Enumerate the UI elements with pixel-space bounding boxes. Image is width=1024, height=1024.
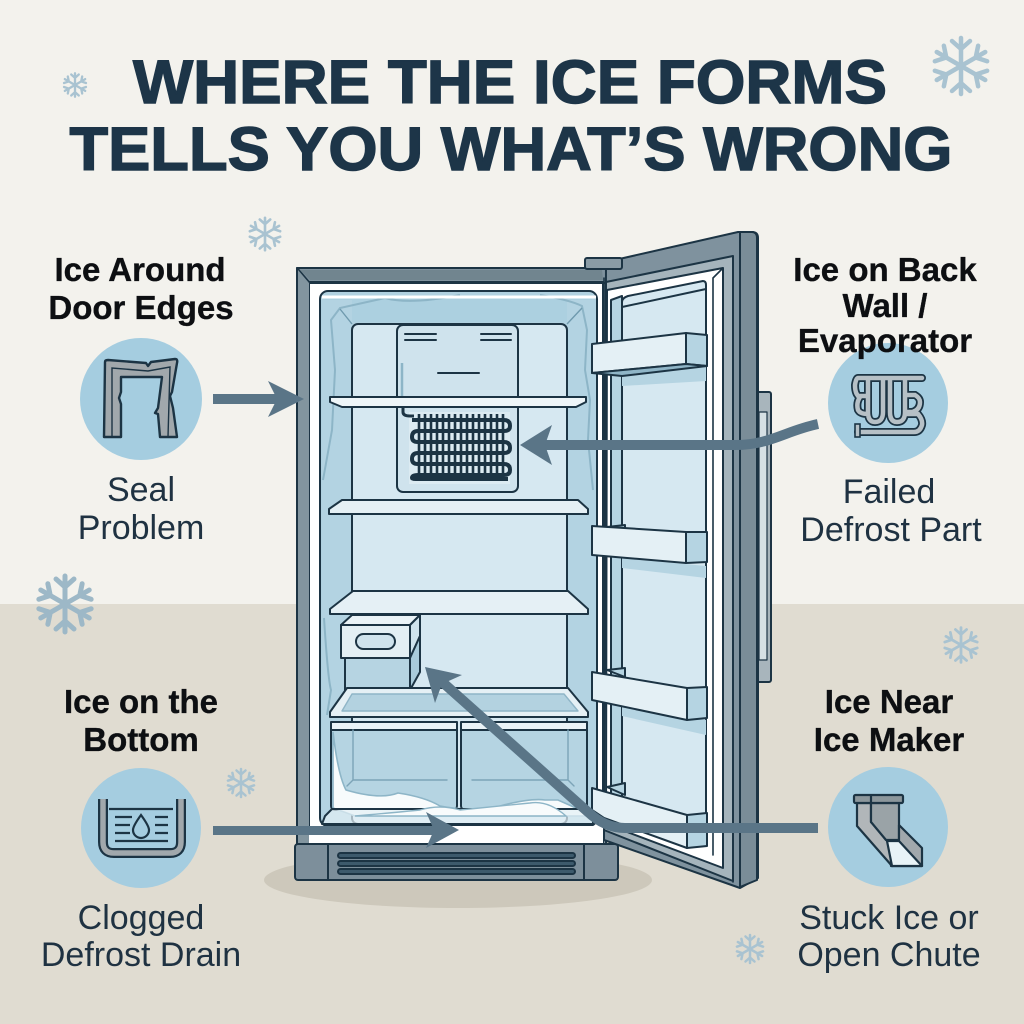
shelf 2 — [329, 500, 588, 514]
heading: ice near ice maker: Ice Maker — [814, 721, 964, 758]
cavity floor — [322, 809, 593, 824]
crisper drawers — [331, 722, 587, 810]
heading: ice on the bottom: Ice on the — [64, 683, 218, 720]
heading: ice around door edges: Door Edges — [48, 289, 234, 326]
door bin 3 — [592, 668, 707, 720]
floor shadow — [264, 852, 652, 908]
ice on drawers bottom — [333, 732, 586, 816]
callout: ice maker — [797, 683, 981, 974]
shelf 1 — [330, 397, 586, 407]
heading: ice near ice maker: Ice Near — [825, 683, 953, 720]
callout: seal problem — [48, 251, 234, 547]
heading: ice on back wall: Wall / — [843, 287, 927, 324]
title: WHERE THE ICE FORMS — [133, 48, 887, 116]
handle — [755, 392, 771, 682]
refrigerator — [295, 232, 771, 888]
rear panel — [397, 325, 518, 492]
heading: ice around door edges: Ice Around — [54, 251, 226, 288]
door bin 4 — [592, 783, 707, 848]
interior cavity — [320, 291, 597, 826]
icon: snowflake bottom left — [227, 769, 255, 797]
callout: failed defrost — [793, 251, 982, 549]
background floor — [0, 604, 1024, 1024]
icon: door seal — [80, 338, 202, 460]
label: clogged defrost drain: Defrost Drain — [41, 936, 241, 974]
evaporator coil — [403, 408, 510, 484]
ice box — [341, 615, 420, 690]
label: stuck ice or open chute: Stuck Ice or — [799, 899, 979, 937]
icon: snowflake left at floor line — [36, 576, 94, 632]
door shelf shadows — [622, 366, 706, 735]
icon: snowflake top right — [932, 38, 990, 94]
title — [70, 48, 952, 183]
icon: ice chute — [828, 767, 948, 887]
shelf 3 — [330, 591, 588, 614]
heading: ice on the bottom: Bottom — [83, 721, 199, 758]
callout: clogged drain — [41, 683, 241, 974]
title: TELLS YOU WHAT’S WRONG — [70, 115, 952, 183]
cabinet body — [297, 268, 606, 845]
arrow: to drain — [213, 812, 459, 848]
icon: snowflake right on floor — [943, 628, 979, 662]
icon: snowflake top left — [63, 73, 87, 97]
icon: snowflake above left label — [248, 218, 282, 250]
left wall ice streak — [324, 618, 331, 715]
heading: ice on back wall: Evaporator — [798, 322, 972, 359]
open door — [585, 232, 758, 888]
label: seal problem: Problem — [78, 509, 204, 547]
label: seal problem: Seal — [107, 471, 175, 509]
arrow: to evaporator — [520, 424, 818, 465]
base grille — [295, 844, 618, 880]
heading: ice on back wall: Ice on Back — [793, 251, 977, 288]
label: clogged defrost drain: Clogged — [78, 899, 204, 937]
icon: evaporator coil — [828, 343, 948, 463]
label: failed defrost part: Defrost Part — [800, 511, 982, 549]
arrow: to door edges — [213, 381, 304, 417]
door bin 1 — [592, 333, 707, 376]
door bin 2 — [592, 525, 707, 563]
label: stuck ice or open chute: Open Chute — [797, 936, 981, 974]
lower white strip — [309, 826, 603, 843]
icon: snowflake bottom right — [736, 935, 764, 963]
background wall — [0, 0, 1024, 604]
lower glass shelf — [330, 688, 588, 717]
label: failed defrost part: Failed — [843, 473, 935, 511]
icon: drain pan — [81, 768, 201, 888]
ice on cavity walls — [322, 295, 596, 490]
arrow: to ice maker — [425, 667, 818, 828]
